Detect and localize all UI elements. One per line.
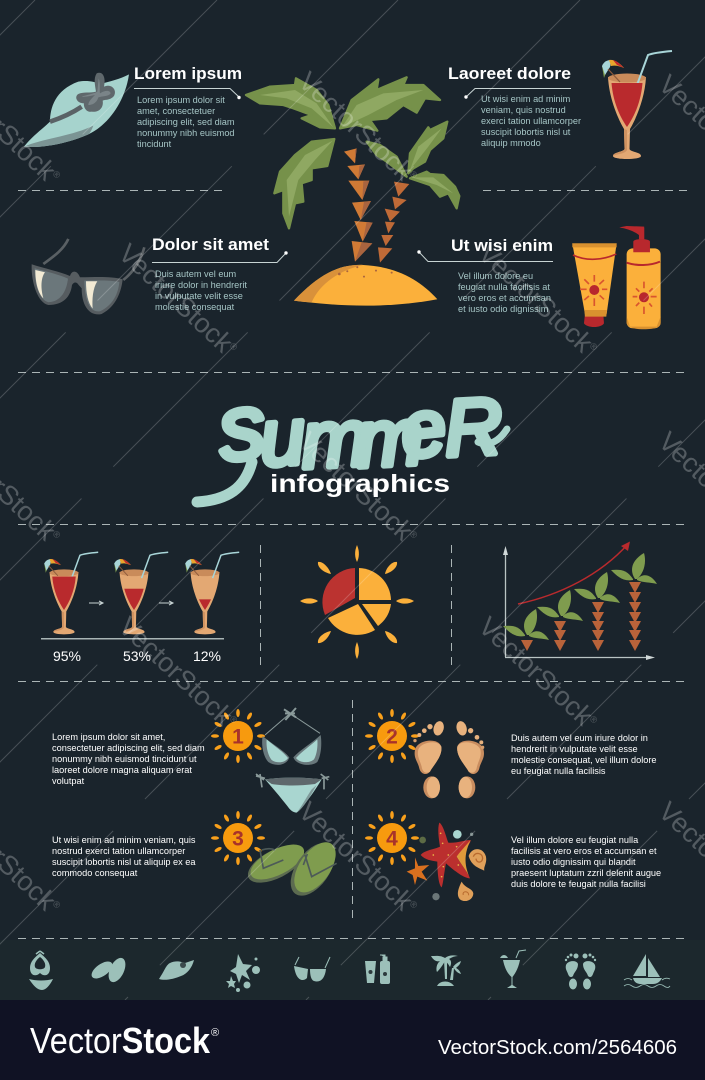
icon: cocktail — [500, 950, 526, 988]
text block 2: hendrerit in vulputate velit esse — [511, 744, 638, 754]
footer url: VectorStock.com/2564606 — [438, 1037, 677, 1059]
text block: Ut wisi enim: vero eros et accumsan — [458, 293, 551, 303]
registered mark: ® — [211, 1027, 219, 1039]
icon: hat — [159, 960, 194, 980]
footer bar — [0, 1000, 705, 1080]
number badge 3: 3 — [232, 828, 244, 850]
island — [294, 265, 437, 306]
heading: Laoreet dolore: Laoreet dolore — [448, 64, 571, 83]
text block: Laoreet dolore: aliquip mmodo — [481, 138, 541, 148]
icon: sailboat — [624, 954, 670, 988]
callout line: Lorem ipsum — [134, 88, 239, 97]
watermark text: ® — [408, 899, 420, 911]
text block 4: facilisis at vero eros et accumsan et — [511, 846, 657, 856]
text block 1: consectetuer adipiscing elit, sed diam — [52, 743, 205, 753]
watermark text: ® — [228, 341, 240, 353]
panel: cocktail percentages — [41, 552, 239, 664]
text block: Laoreet dolore: Ut wisi enim ad minim — [481, 94, 571, 104]
watermark text: ® — [51, 899, 63, 911]
icon: flip flops — [89, 955, 129, 985]
palm growth chart — [503, 542, 657, 660]
glass 12% — [185, 552, 239, 634]
watermark text: VectorStock — [473, 238, 599, 358]
palm 3 — [574, 572, 620, 651]
callout line: Dolor sit amet — [152, 253, 286, 262]
heading: Ut wisi enim: Ut wisi enim — [451, 236, 553, 255]
text block 2: molestie consequat, vel illum dolore — [511, 755, 657, 765]
label 53%: 53% — [123, 648, 151, 664]
watermark text: VectorStock — [113, 238, 239, 358]
icon: bikini — [29, 951, 53, 990]
watermark text: VectorStock — [293, 796, 419, 916]
text block: Laoreet dolore: exerci tation ullamcorper — [481, 116, 581, 126]
watermark text: ® — [588, 341, 600, 353]
text block: Laoreet dolore: suscipit lobortis nisl ut — [481, 127, 571, 137]
watermark text: ® — [51, 529, 63, 541]
callout dot: Laoreet dolore — [464, 95, 468, 99]
text block: Lorem ipsum: Lorem ipsum dolor sit — [137, 95, 225, 105]
watermark text: VectorStock — [113, 611, 239, 731]
text block: Lorem ipsum: nonummy nibh euismod — [137, 128, 235, 138]
text block 4: praesent luptatum zzril delenit augue — [511, 868, 661, 878]
watermark text: ® — [588, 714, 600, 726]
footer logo: VectorStock — [30, 1020, 211, 1061]
number badge 4 — [365, 811, 419, 865]
text block: Dolor sit amet: in vulputate velit esse — [155, 291, 243, 301]
watermark text: VectorStock — [293, 426, 419, 546]
text block 4: iusto odio dignissim qui blandit — [511, 857, 636, 867]
palm 2 — [537, 590, 583, 651]
text block 2: eu feugiat nulla facilisis — [511, 766, 606, 776]
bikini illustration — [256, 708, 329, 813]
text block: Dolor sit amet: iriure dolor in hendrerit — [155, 280, 247, 290]
text block 1: laoreet dolore magna aliquam erat — [52, 765, 192, 775]
number badge 4: 4 — [386, 828, 398, 850]
text block 4: duis dolore te feugait nulla facilisi — [511, 879, 646, 889]
text block 3: commodo consequat — [52, 868, 138, 878]
glass 95% — [44, 552, 98, 634]
title: summer: summeR — [213, 375, 505, 485]
number badge 2 — [365, 709, 419, 763]
watermark text: ® — [408, 169, 420, 181]
text block 3: Ut wisi enim ad minim veniam, quis — [52, 835, 196, 845]
palm leaves — [246, 77, 459, 228]
watermark text — [0, 66, 705, 921]
footprints illustration — [413, 720, 484, 798]
arrow 1 — [89, 601, 103, 605]
glass 53% — [114, 552, 168, 634]
number badge 1 — [211, 709, 265, 763]
icon: footprints — [565, 954, 596, 990]
watermark text: VectorStock — [293, 66, 419, 186]
growth arrow — [518, 544, 628, 604]
flip flops illustration — [242, 835, 344, 903]
text block 3: suscipit lobortis nisl ut aliquip ex ea — [52, 857, 196, 867]
text block: Dolor sit amet: molestie consequat — [155, 302, 235, 312]
text block: Ut wisi enim: et iusto odio dignissim — [458, 304, 549, 314]
callout dot: Dolor sit amet — [284, 251, 288, 255]
big palm trunk — [344, 148, 373, 262]
watermark text: VectorStock — [473, 611, 599, 731]
sunscreen bottles illustration — [572, 226, 661, 329]
text block 3: nostrud exerci tation ullamcorper — [52, 846, 185, 856]
callout line: Laoreet dolore — [466, 88, 571, 97]
watermark text: ® — [228, 714, 240, 726]
divider lines — [18, 190, 688, 938]
text block 2: Duis autem vel eum iriure dolor in — [511, 733, 648, 743]
callout dot: Ut wisi enim — [417, 250, 421, 254]
sunglasses illustration — [32, 239, 144, 314]
heading: Dolor sit amet: Dolor sit amet — [152, 235, 269, 254]
palm 1 — [503, 609, 549, 651]
baseline — [41, 638, 224, 640]
number badge 3 — [211, 811, 265, 865]
number badge 2: 2 — [386, 726, 398, 748]
text block: Ut wisi enim: feugiat nulla facilisis at — [458, 282, 550, 292]
icon: sunscreen — [365, 955, 390, 984]
text block: Dolor sit amet: Duis autem vel eum — [155, 269, 237, 279]
starfish and shells illustration — [407, 823, 486, 901]
icon: palm — [431, 955, 461, 986]
icon: sunglasses — [294, 957, 330, 981]
small palm trunk — [378, 182, 409, 263]
text block 1: nonummy nibh euismod tincidunt ut — [52, 754, 197, 764]
icon: starfish and shells — [226, 954, 260, 992]
text block 1: Lorem ipsum dolor sit amet, — [52, 732, 165, 742]
palm 4 — [611, 553, 657, 651]
watermark text: ® — [408, 529, 420, 541]
number badge 1: 1 — [232, 726, 244, 748]
label 12%: 12% — [193, 648, 221, 664]
cocktail illustration — [602, 51, 672, 159]
sun pie chart — [300, 545, 414, 659]
text block 4: Vel illum dolore eu feugiat nulla — [511, 835, 639, 845]
text block: Lorem ipsum: adipiscing elit, sed diam — [137, 117, 235, 127]
text block 1: volutpat — [52, 776, 85, 786]
heading: Lorem ipsum: Lorem ipsum — [134, 64, 242, 83]
watermark text: ® — [51, 169, 63, 181]
palm island illustration — [246, 77, 459, 306]
text block: Lorem ipsum: tincidunt — [137, 139, 172, 149]
hat illustration — [24, 73, 129, 147]
text block: Ut wisi enim: Vel illum dolore eu — [458, 271, 533, 281]
arrow 2 — [159, 601, 173, 605]
label 95%: 95% — [53, 648, 81, 664]
subtitle: infographics: infographics — [270, 470, 450, 498]
text block: Laoreet dolore: veniam, quis nostrud — [481, 105, 566, 115]
callout line: Ut wisi enim — [419, 252, 553, 262]
callout dot: Lorem ipsum — [237, 96, 241, 99]
bottom icon row — [29, 950, 670, 992]
axes — [505, 549, 652, 658]
text block: Lorem ipsum: amet, consectetuer — [137, 106, 215, 116]
